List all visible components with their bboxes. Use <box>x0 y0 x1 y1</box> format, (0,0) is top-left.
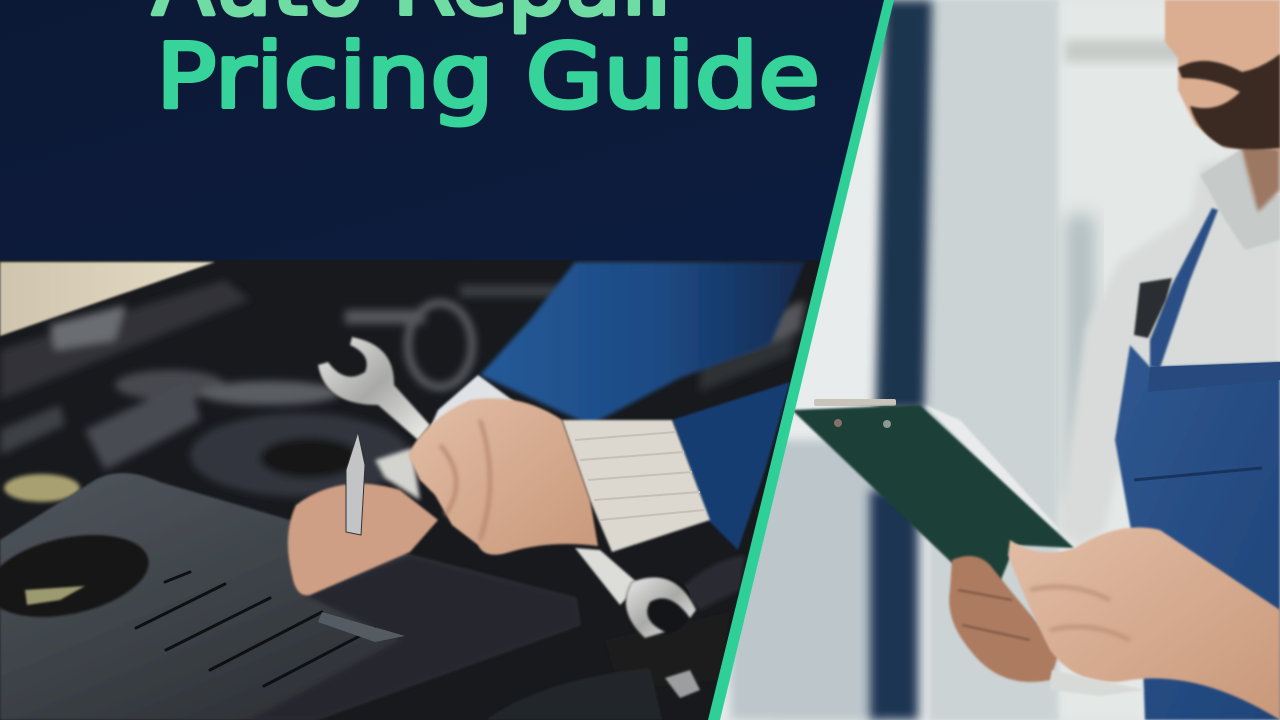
blurred engine parts <box>0 280 805 497</box>
apron <box>1115 208 1280 720</box>
neck <box>1240 145 1280 212</box>
wrench <box>318 337 696 638</box>
lower hand <box>288 484 438 595</box>
engine cover <box>0 473 580 720</box>
lower-right engine parts and hose <box>486 555 745 720</box>
white cuffs <box>375 375 710 552</box>
engine bay background <box>0 260 830 720</box>
workshop background <box>700 0 1280 720</box>
fist holding wrench <box>408 398 598 555</box>
oil cap <box>4 474 80 502</box>
hands holding clipboard <box>949 527 1280 720</box>
photo: mechanic holding clipboard (right side) <box>700 0 1280 720</box>
title: Pricing Guide: Pricing Guide <box>156 24 820 128</box>
shirt collar <box>1200 150 1280 250</box>
panel: navy title banner <box>0 0 890 260</box>
photo: hands working on an engine (left side) <box>0 260 830 720</box>
mechanic shirt <box>1058 150 1280 545</box>
blurred beige car hood <box>0 262 215 336</box>
pen <box>346 432 365 535</box>
clipboard <box>792 399 1074 582</box>
green diagonal divider <box>708 0 894 720</box>
beard and moustache <box>1178 54 1280 150</box>
blue sleeve forearm <box>672 382 790 550</box>
blue sleeve upper arm <box>480 262 805 425</box>
face <box>1165 0 1280 150</box>
